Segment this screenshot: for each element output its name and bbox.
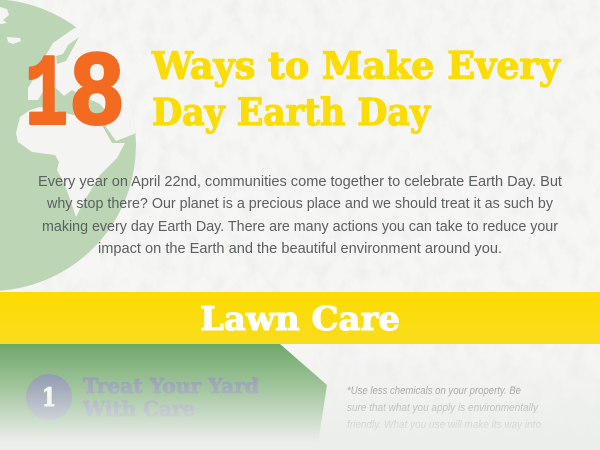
step heading: With Care: [82, 397, 195, 421]
section banner: Lawn Care: [0, 292, 600, 344]
title: Day Earth Day: [152, 90, 431, 134]
step description: sure that what you apply is environmentally: [347, 402, 539, 414]
intro text: Every year on April 22nd, communities come together to celebrate Earth Day. But: [38, 173, 563, 190]
number 18: [25, 34, 123, 154]
icon: step number 1: 1: [42, 383, 56, 412]
intro text: [38, 173, 563, 257]
step description: friendly. What you use will make its way into: [347, 419, 541, 431]
icon: globe: [0, 0, 140, 291]
intro text: why stop there? Our planet is a precious place and we should treat it as such by: [46, 195, 553, 212]
step heading: [82, 374, 259, 421]
panel: step 1 green header: [0, 344, 327, 450]
section banner: Lawn Care: Lawn Care: [200, 299, 400, 338]
icon: step number 1: [26, 374, 72, 420]
step description: [347, 385, 541, 431]
title: Ways to Make Every: [151, 44, 561, 88]
intro text: making every day Earth Day. There are many actions you can take to reduce your: [42, 218, 558, 235]
bottom fade overlay: [0, 344, 600, 450]
intro text: impact on the Earth and the beautiful environment around you.: [98, 240, 502, 257]
number 18: 1: [25, 40, 68, 154]
step description: *Use less chemicals on your property. Be: [347, 385, 521, 397]
step heading: Treat Your Yard: [83, 374, 259, 398]
title: [151, 44, 561, 134]
number 18: 8: [71, 34, 123, 146]
